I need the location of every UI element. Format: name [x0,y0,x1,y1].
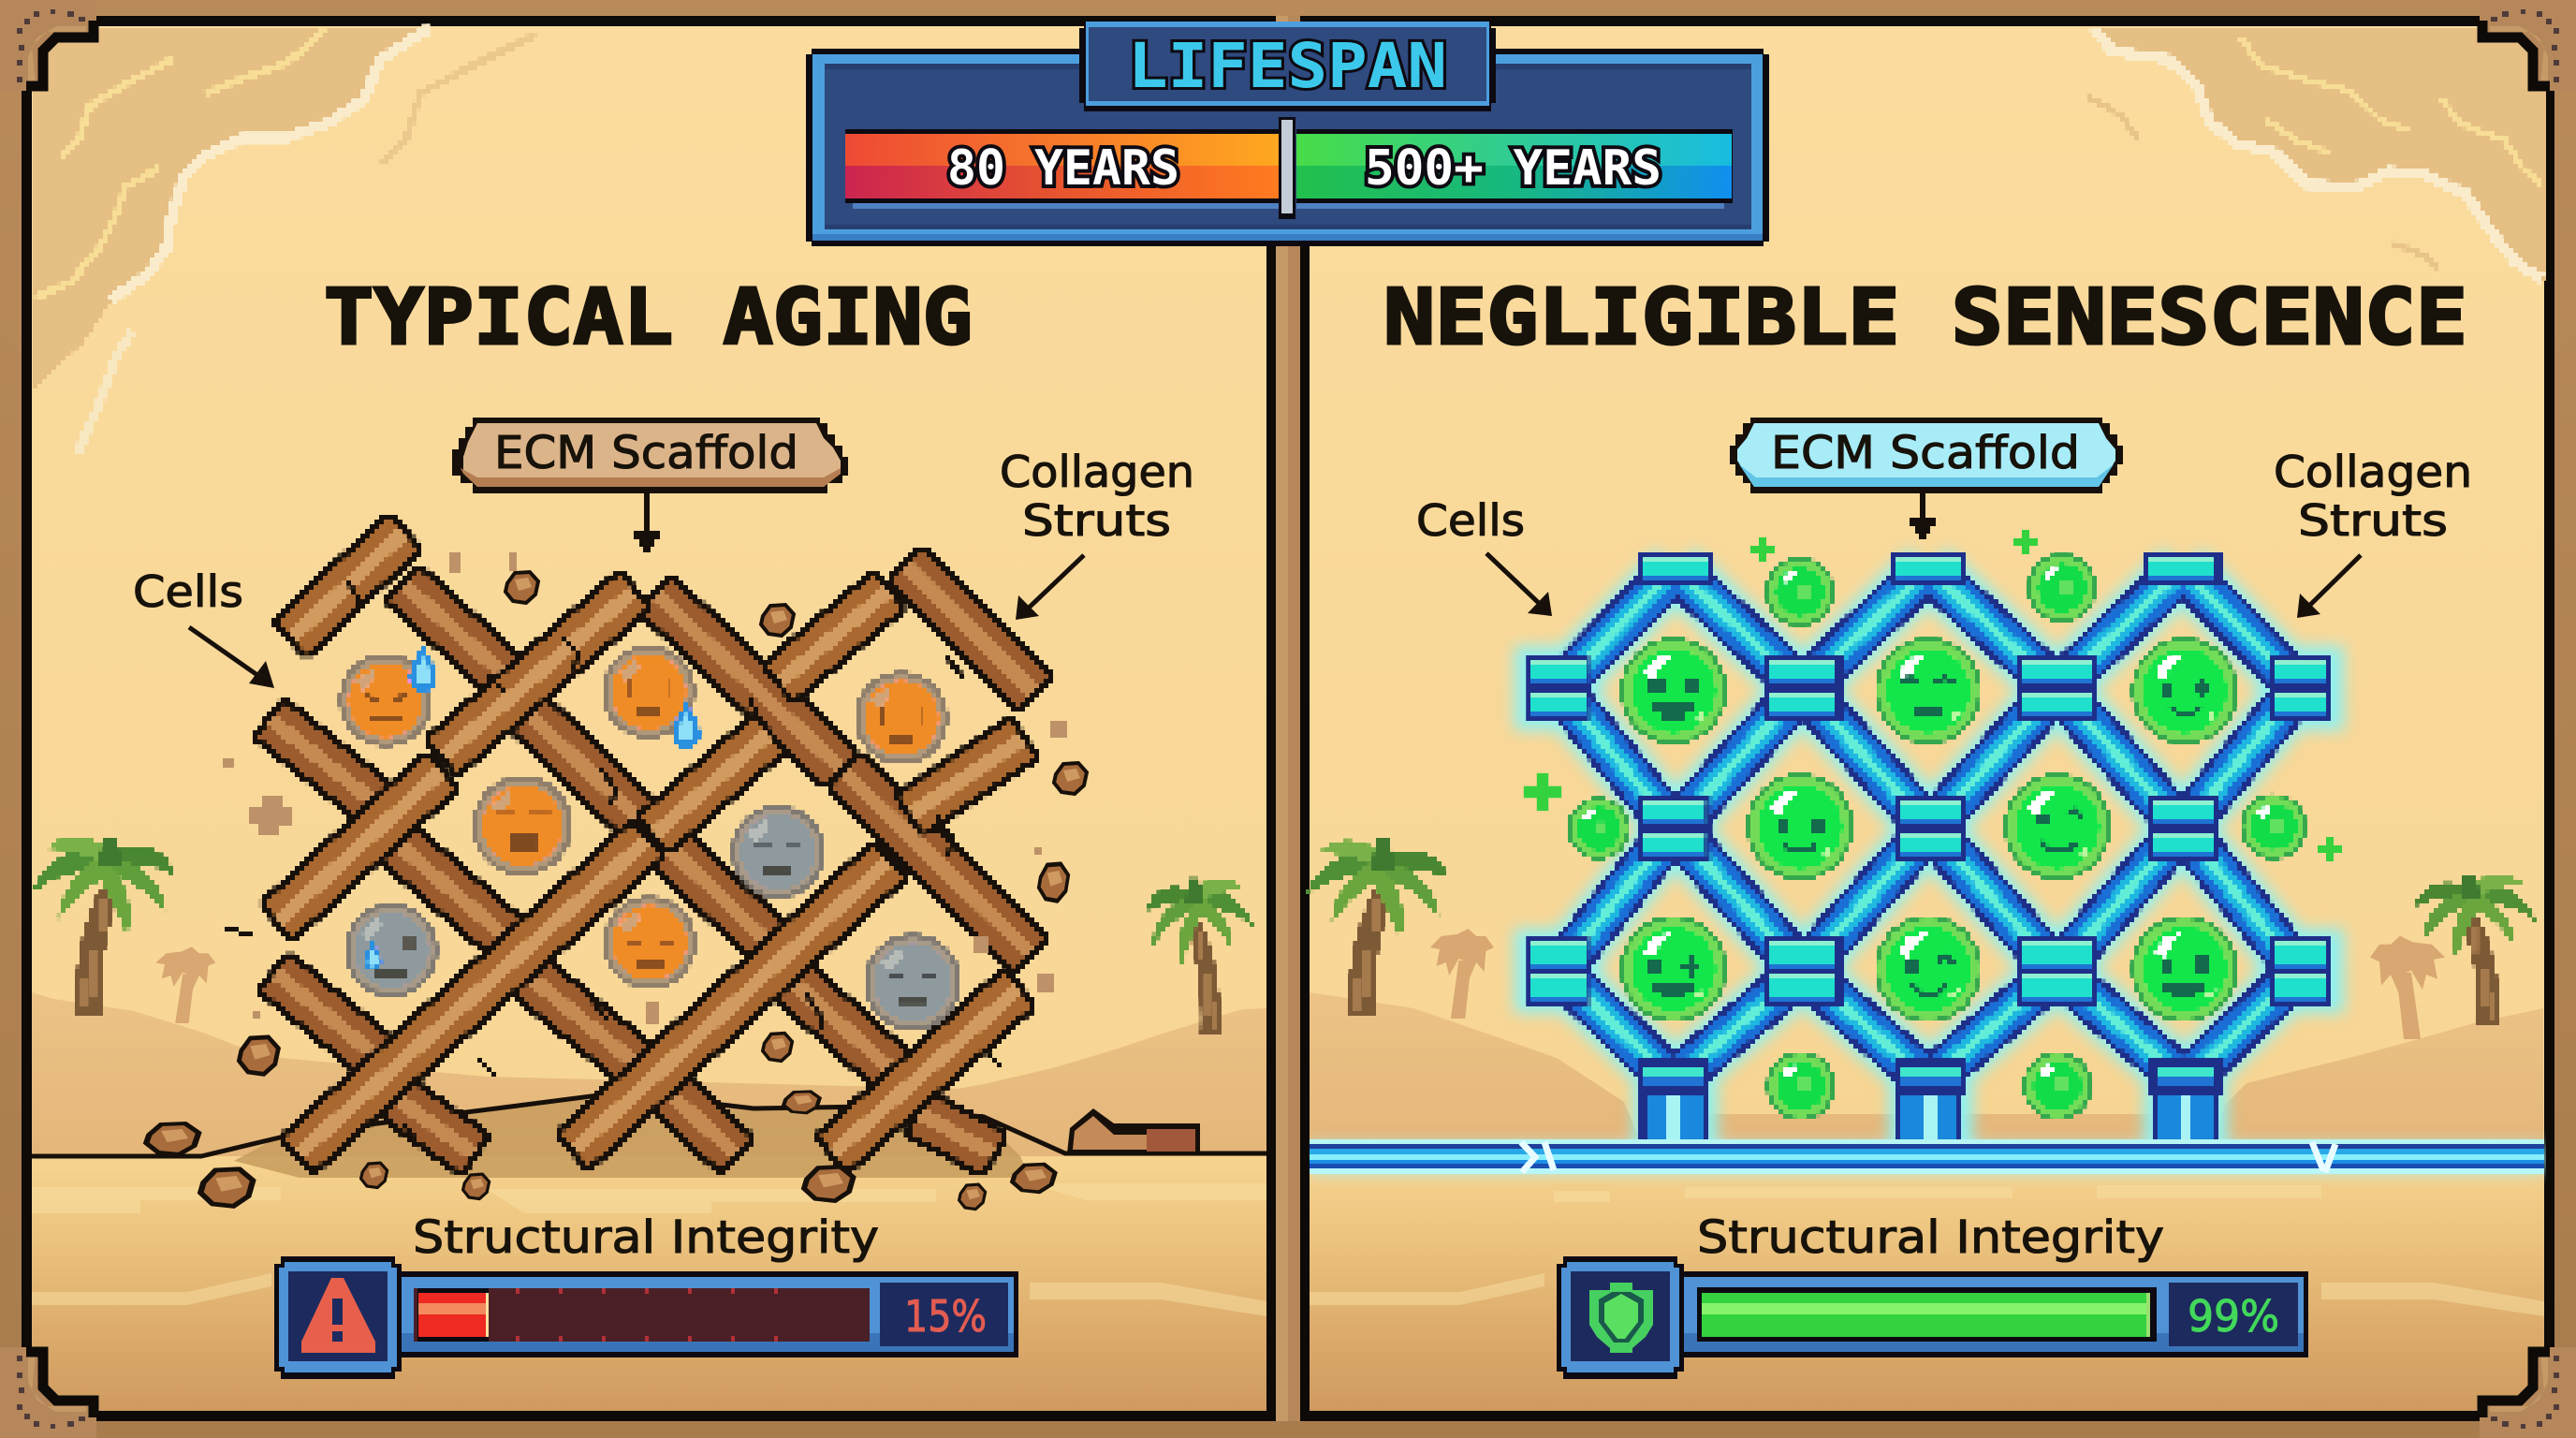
cell: plus eye [1620,916,1727,1022]
struts [1559,569,2300,1081]
label: collagen struts: Struts [1022,495,1171,546]
arrow: ECM to lattice [1910,493,1936,539]
label: collagen struts [2274,447,2472,546]
sweat drops [363,644,700,971]
title plate: lifespan: LIFESPAN [1128,30,1447,102]
label: ECM scaffold: ECM Scaffold [1771,427,2080,479]
support posts [1638,1056,2221,1152]
sand swoosh top right [2088,26,2544,279]
distant palm right [2370,936,2445,1039]
rocks and debris [146,552,1200,1210]
healthy ECM lattice [1528,552,2331,1152]
lifespan bar: 80 years [845,129,1279,209]
panel: lifespan [806,22,1769,246]
junctions row 3 [1528,936,2331,1005]
label: structural integrity: Structural Integrity [1697,1211,2164,1264]
dying cells [339,644,961,1031]
cell: winking [2131,638,2238,744]
collagen struts back layer [271,566,1033,1153]
label: collagen struts [1000,447,1194,546]
arrow: collagen struts [2297,555,2361,618]
panel: negligible senescence [1300,16,2554,1421]
lifespan bar: 80 years: 80 YEARS [947,140,1179,197]
cell: fading orange [855,671,948,765]
label: structural integrity: Structural Integrity [413,1211,879,1264]
junctions row 1 [1528,653,2331,723]
sand swoosh top left [32,26,535,454]
cell: tired orange [339,653,432,747]
cell: grey tired [864,933,961,1031]
label: ECM scaffold: ECM Scaffold [494,427,798,479]
cell: grey [731,805,825,899]
gauge: 15 percent [402,1271,1018,1357]
title plate: lifespan [1079,22,1496,111]
panel: typical aging [22,16,1276,1421]
free orbs [1568,553,2306,1121]
healthy cells [1568,553,2306,1121]
background dunes [32,992,1266,1156]
ticks [518,1288,776,1342]
palm tree right [1146,878,1254,1033]
cell: open smile [2131,916,2238,1022]
icon: shield [1557,1256,1684,1379]
cell: crying orange [472,775,573,876]
broken ECM lattice [225,534,1033,1153]
collagen struts front layer [279,534,1022,1153]
palm tree right [2415,873,2538,1023]
value 15%: 15% [904,1291,987,1342]
cell: grinning [1620,638,1727,744]
cell: winking happy [2004,773,2111,880]
lifespan bar: 500+ years [1296,129,1733,209]
label: cells: Cells [1416,495,1525,546]
cell: worried orange [602,645,695,739]
heading: typical aging: TYPICAL AGING [324,273,973,362]
cell: grey crying [344,903,438,997]
cell: sad orange [603,896,696,990]
background dunes [1310,992,2543,1156]
lifespan bar: 500+ years: 500+ YEARS [1365,140,1661,197]
icon: warning [274,1256,402,1379]
arrow: ECM to lattice [634,493,660,552]
palm tree left [31,836,175,1014]
label: ECM scaffold [1730,418,2123,493]
cell: happy eyes closed [1875,638,1982,744]
plus signs [1524,530,2342,861]
sand waves foreground [32,1183,1266,1316]
arrow: cells [189,627,274,688]
junctions row 2 [1638,794,2219,863]
label: collagen struts: Collagen [1000,447,1194,497]
label: ECM scaffold [452,418,848,493]
glow behind lattice [1310,569,2544,1172]
distant palm [155,946,215,1023]
sand waves foreground [1310,1185,2544,1316]
palm tree left [1304,840,1448,1018]
gauge: 99 percent [1684,1271,2308,1357]
label: collagen struts: Struts [2298,495,2448,546]
top connectors [1637,552,1714,586]
broken strut piece [1067,1108,1200,1153]
distant palm left [1430,929,1494,1019]
centre divider [1276,16,1300,1421]
bar divider [1279,117,1295,219]
cracks [225,580,1002,1147]
label: cells: Cells [133,566,243,617]
ground line with debris mound [32,1093,1266,1178]
arrow: cells [1486,553,1552,616]
value 99%: 99% [2188,1291,2279,1342]
glowing base line [1310,1139,2544,1174]
arrow: collagen struts [1016,555,1084,620]
heading: negligible senescence: NEGLIGIBLE SENESCENCE [1383,273,2467,362]
cell: smiling [1747,773,1853,880]
cell: wink smile [1875,916,1982,1022]
label: collagen struts: Collagen [2274,447,2472,497]
